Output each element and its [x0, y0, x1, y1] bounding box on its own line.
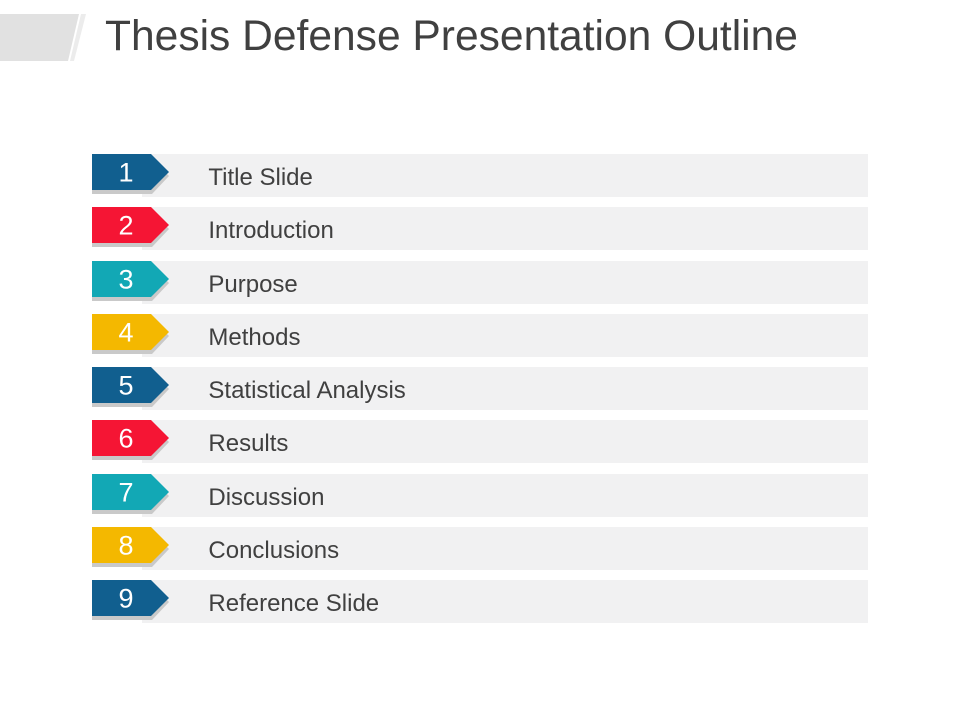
- row 4: Methods: Methods: [208, 324, 300, 351]
- row 5: Statistical Analysis: Statistical Analysis: [208, 377, 406, 404]
- row 8: Conclusions: Conclusions: [208, 537, 339, 564]
- row 7: Discussion: [92, 474, 868, 517]
- title: Thesis Defense Presentation Outline: [105, 12, 798, 60]
- row 1: Title Slide: [92, 154, 868, 197]
- title decoration: [0, 14, 86, 61]
- row 2: Introduction: Introduction: [208, 217, 334, 244]
- row 7: Discussion: Discussion: [208, 484, 324, 511]
- row 9: Reference Slide: Reference Slide: [208, 590, 379, 617]
- row 2: Introduction: [92, 207, 868, 250]
- row 3: Purpose: Purpose: [208, 271, 298, 298]
- row 4: Methods: [92, 314, 868, 357]
- row 8: Conclusions: [92, 527, 868, 570]
- row 2: Introduction: 2: [118, 210, 134, 240]
- row 6: Results: [92, 420, 868, 463]
- row 3: Purpose: [92, 261, 868, 304]
- row 7: Discussion: 7: [118, 478, 134, 508]
- row 5: Statistical Analysis: [92, 367, 868, 410]
- row 1: Title Slide: 1: [118, 158, 134, 188]
- row 4: Methods: 4: [118, 318, 134, 348]
- row 6: Results: Results: [208, 430, 288, 457]
- row 5: Statistical Analysis: 5: [118, 370, 134, 400]
- row 9: Reference Slide: 9: [118, 584, 134, 614]
- row 1: Title Slide: Title Slide: [208, 164, 313, 191]
- row 8: Conclusions: 8: [118, 530, 134, 560]
- row 3: Purpose: 3: [118, 264, 134, 294]
- row 6: Results: 6: [118, 424, 134, 454]
- row 9: Reference Slide: [92, 580, 868, 623]
